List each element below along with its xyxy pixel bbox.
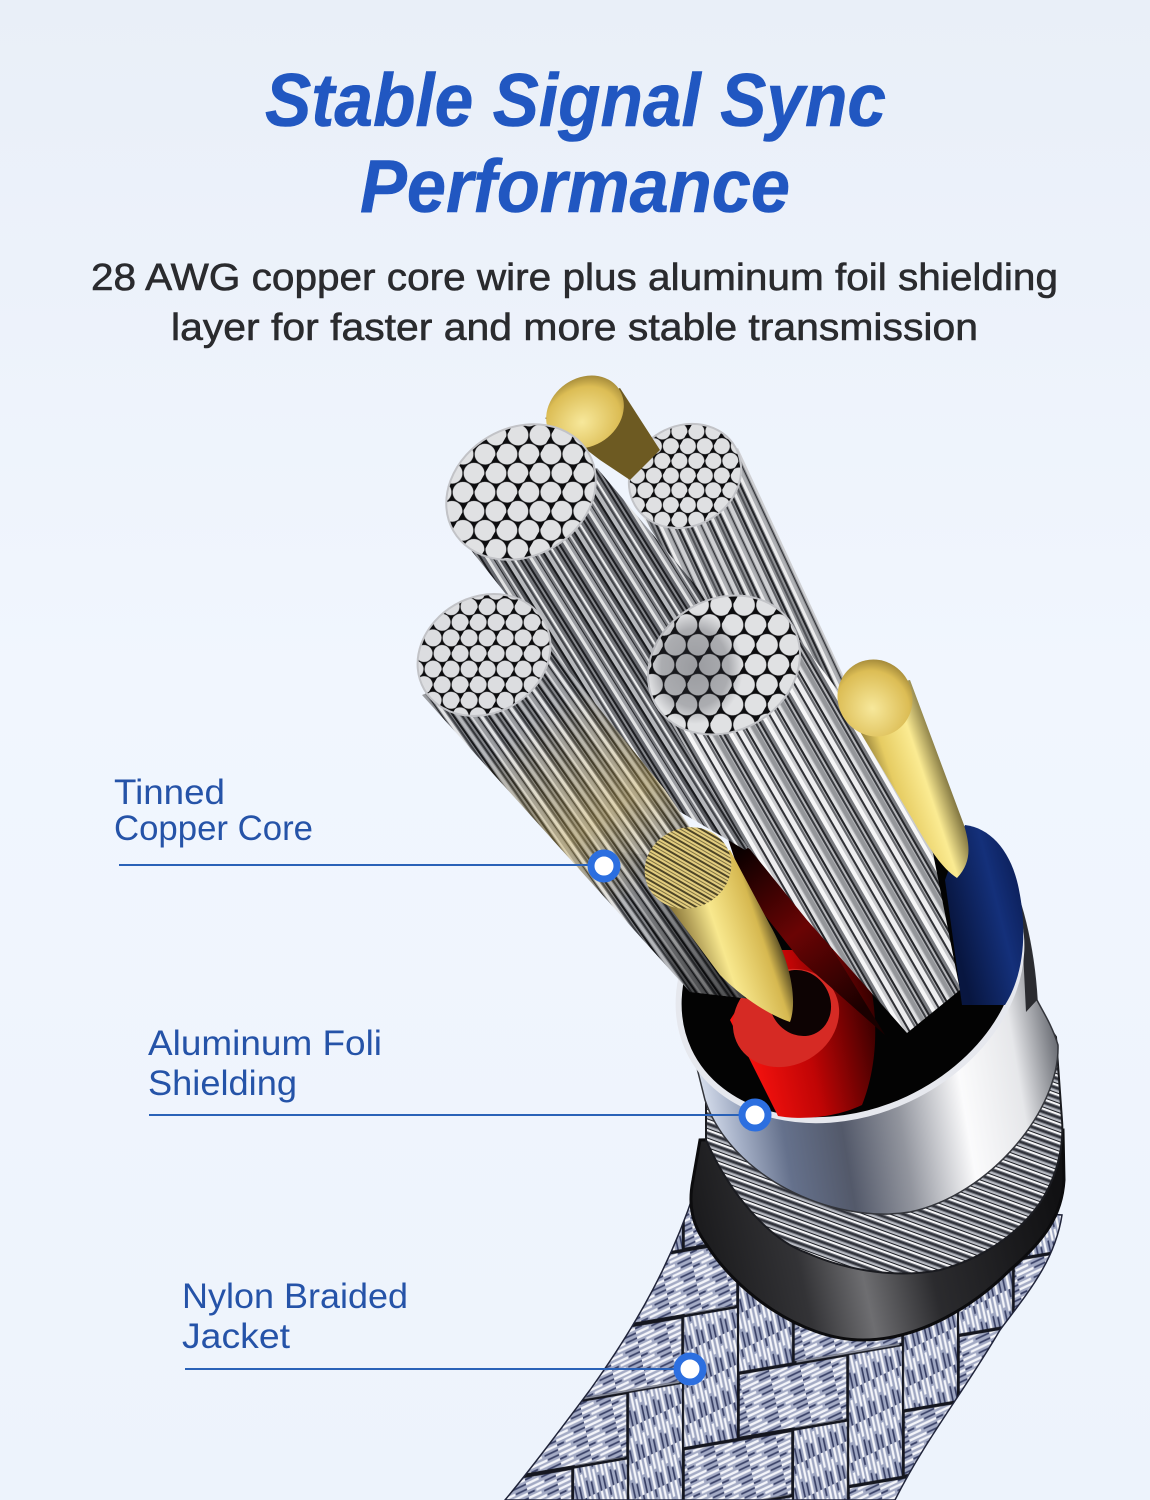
blue insulated wire xyxy=(945,825,1023,1005)
cable illustration xyxy=(395,361,1069,1500)
subtitle text: 28 AWG copper core wire plus aluminum foil shielding xyxy=(91,257,1058,299)
title xyxy=(265,58,886,228)
callout: aluminum foil shielding: Shielding xyxy=(148,1064,297,1103)
callout: tinned copper core: Tinned xyxy=(114,773,225,812)
left bundle strand end xyxy=(395,570,573,740)
dark outer wall of tube xyxy=(1000,860,1037,1012)
subtitle text xyxy=(91,257,1058,349)
callout: tinned copper core xyxy=(114,773,617,879)
dark gap between bundles xyxy=(725,830,885,1035)
title: Performance xyxy=(360,144,790,228)
callout: nylon braided jacket xyxy=(182,1277,703,1382)
rear bundle strand end right xyxy=(610,404,760,548)
steel wire mesh xyxy=(706,1000,1062,1273)
gold core rear xyxy=(532,361,660,480)
silver foil shielding tube xyxy=(690,860,1058,1214)
callout: tinned copper core: Copper Core xyxy=(114,809,313,848)
tinned copper bundle front xyxy=(650,640,960,1033)
gold core right xyxy=(823,646,968,878)
nylon braided jacket xyxy=(505,1190,1062,1500)
front bundle strand end xyxy=(623,568,825,762)
title: Stable Signal Sync xyxy=(265,58,886,142)
rear bundle strand end left xyxy=(421,398,621,586)
tube opening xyxy=(631,776,1069,1174)
black collar ring xyxy=(691,1130,1064,1340)
callout: nylon braided jacket: Jacket xyxy=(182,1317,290,1356)
tinned copper bundle rear left xyxy=(455,468,800,850)
gold core centre xyxy=(631,813,793,1022)
tinned copper bundle rear right xyxy=(632,448,860,760)
subtitle text: layer for faster and more stable transmission xyxy=(171,307,978,349)
callout: nylon braided jacket: Nylon Braided xyxy=(182,1277,408,1316)
callout: aluminum foil shielding xyxy=(148,1024,768,1128)
tinned copper bundle left xyxy=(422,645,780,1000)
callout: aluminum foil shielding: Aluminum Foli xyxy=(148,1024,382,1063)
red insulated wire xyxy=(715,950,875,1118)
